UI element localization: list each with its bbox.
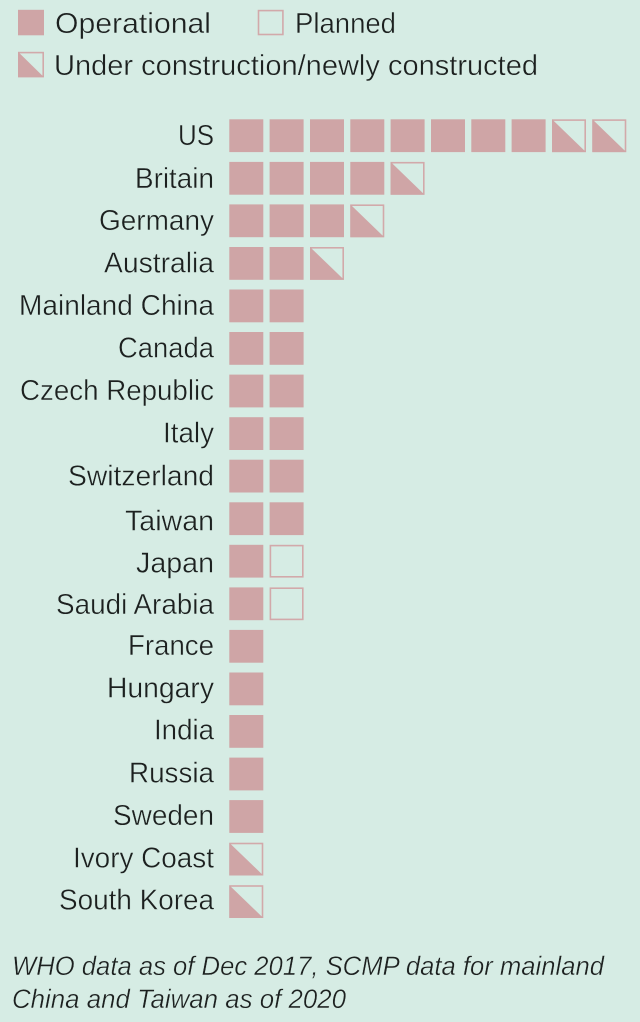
footnote: WHO data as of Dec 2017, SCMP data for mainland — [12, 951, 605, 981]
row: Hungary: Hungary — [107, 672, 214, 704]
footnote: China and Taiwan as of 2020 — [12, 984, 346, 1014]
row: Sweden: Sweden — [113, 800, 214, 832]
row: Australia: Australia — [104, 248, 215, 280]
row: Russia — [129, 757, 263, 790]
row: Canada — [118, 332, 304, 365]
row: Switzerland: Switzerland — [68, 460, 214, 492]
row: South Korea: South Korea — [59, 884, 215, 916]
row: France: France — [128, 630, 214, 662]
row: Australia — [104, 247, 344, 280]
row: Taiwan: Taiwan — [125, 506, 214, 538]
row: Sweden — [113, 800, 263, 833]
row: France — [128, 630, 263, 663]
row: Ivory Coast: Ivory Coast — [73, 842, 214, 874]
row: Britain — [135, 162, 425, 195]
row: Czech Republic — [20, 375, 304, 407]
row: Italy: Italy — [163, 418, 214, 450]
row: India — [154, 714, 263, 748]
row: Czech Republic: Czech Republic — [20, 375, 214, 407]
row: Italy — [163, 417, 304, 450]
footnote — [12, 951, 605, 1014]
row: US — [178, 119, 626, 152]
row: Hungary — [107, 672, 263, 705]
row: Japan: Japan — [136, 547, 214, 579]
legend: under construction: Under construction/newly constructed — [54, 50, 538, 82]
legend — [18, 8, 538, 82]
row: India: India — [154, 714, 215, 746]
row: Germany — [99, 204, 384, 237]
row: Germany: Germany — [99, 205, 214, 237]
row: Mainland China — [19, 290, 304, 322]
row: Britain: Britain — [135, 163, 214, 195]
row: Mainland China: Mainland China — [19, 290, 215, 322]
row: Saudi Arabia: Saudi Arabia — [56, 589, 215, 621]
row: Taiwan — [125, 502, 304, 538]
legend: operational: Operational — [55, 8, 211, 40]
row: US: US — [178, 120, 214, 152]
row: Saudi Arabia — [56, 587, 303, 621]
legend: planned: Planned — [295, 8, 396, 40]
row: Russia: Russia — [129, 757, 215, 789]
row: Switzerland — [68, 460, 304, 492]
row: Canada: Canada — [118, 333, 215, 365]
row: Japan — [136, 545, 303, 579]
